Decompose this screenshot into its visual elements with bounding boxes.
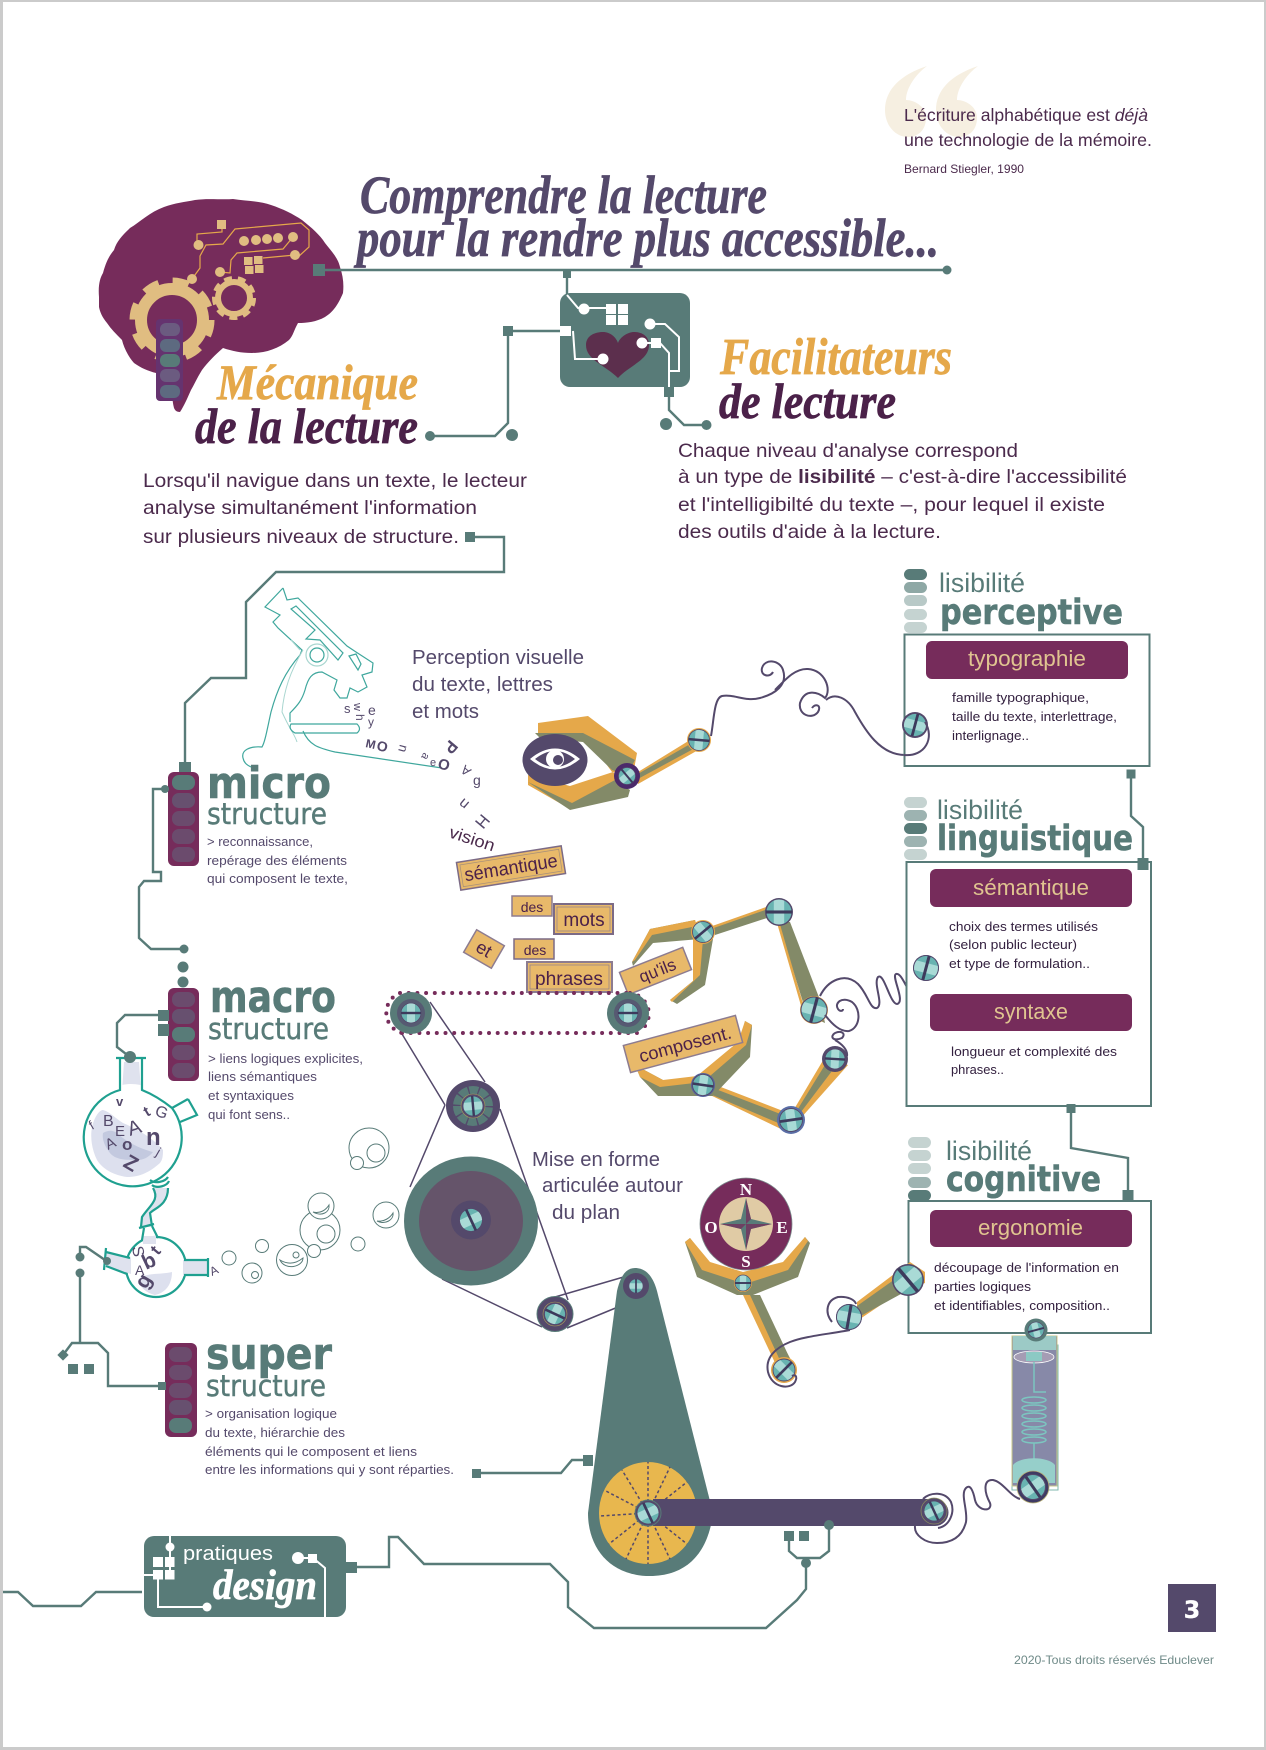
- panel: lisibilité linguistique: phrases..: [951, 1062, 1004, 1077]
- text: letters from microscope: M: [364, 736, 377, 752]
- text: mécanique intro: [143, 470, 528, 548]
- text: mécanique intro: sur plusieurs niveaux de structure.: [143, 526, 459, 548]
- text: mise en forme: [532, 1149, 683, 1224]
- circuit: perceptive to linguistique: [1126, 770, 1143, 860]
- panel: lisibilité linguistique: choix des termes utilisés: [949, 919, 1099, 934]
- panel: lisibilité cognitive: [908, 1136, 1151, 1333]
- icon: eye in arm: [522, 716, 711, 810]
- text: mise en forme: articulée autour: [542, 1175, 683, 1197]
- text: letters from microscope: a: [418, 750, 432, 763]
- panel: super structure: entre les informations qui y sont réparties.: [205, 1462, 454, 1477]
- icon: compass on arm: N: [740, 1180, 753, 1199]
- panel: lisibilité perceptive: perceptive: [940, 593, 1123, 633]
- page number: 3: [1184, 1596, 1200, 1624]
- panel: macro structure: qui font sens..: [208, 1107, 290, 1122]
- icon: lower claw arm: [635, 1021, 848, 1134]
- icon: heart chip: [560, 270, 712, 430]
- icon: flasks with letters: S: [128, 1245, 147, 1258]
- icon: quotation mark: [885, 66, 978, 137]
- circuit: bottom lines: [3, 1520, 834, 1628]
- panel: pratiques design: pratiques: [183, 1543, 273, 1565]
- panel: lisibilité perceptive: typographie: [968, 646, 1086, 671]
- circuit: title underline: [313, 264, 952, 276]
- text: letters from microscope: e: [430, 757, 436, 769]
- text: letters from microscope: vision: [447, 823, 497, 855]
- icon: arm to ergonomie: [834, 1259, 929, 1331]
- wire: compass loop: [767, 1297, 856, 1387]
- panel: micro structure: qui composent le texte,: [207, 871, 348, 886]
- circuit: macro to flask: [117, 1010, 169, 1057]
- wire: to perceptive: [711, 661, 929, 755]
- text: letters from microscope: H: [471, 810, 493, 832]
- icon: belt pulleys and chain: [386, 992, 649, 1332]
- tag: qu'ils: qu'ils: [636, 955, 679, 987]
- icon: flasks with letters: A: [125, 1116, 145, 1141]
- panel: lisibilité linguistique: syntaxe: [994, 999, 1068, 1024]
- panel: micro structure: structure: [207, 797, 327, 831]
- icon: flasks with letters: B: [103, 1113, 114, 1130]
- text: facilitateurs intro: et l'intelligibilté du texte –, pour lequel il existe: [678, 494, 1105, 516]
- panel: lisibilité cognitive: ergonomie: [978, 1215, 1083, 1240]
- icon: screw on perceptive: [901, 711, 929, 739]
- panel: micro structure: repérage des éléments: [207, 853, 348, 868]
- text: letters from microscope: O: [375, 737, 389, 755]
- panel: macro structure: et syntaxiques: [208, 1088, 295, 1103]
- icon: flasks with letters: A: [207, 1263, 221, 1279]
- panel: lisibilité linguistique: lisibilité: [937, 795, 1023, 825]
- circuit: micro to macro: [139, 785, 188, 988]
- panel: lisibilité linguistique: linguistique: [937, 819, 1133, 859]
- word tags: sémantique: [463, 851, 559, 886]
- icon: flasks with letters: [82, 1051, 221, 1297]
- icon: screw on linguistique: [911, 953, 941, 983]
- text: letters from microscope: y: [368, 715, 374, 729]
- panel: super structure: du texte, hiérarchie des: [205, 1425, 346, 1440]
- tag: qu'ils: [619, 947, 692, 995]
- panel: lisibilité perceptive: taille du texte, interlettrage,: [952, 709, 1117, 724]
- panel: super structure: éléments qui le composent et liens: [205, 1444, 418, 1459]
- icon: flasks with letters: E: [115, 1123, 125, 1140]
- text: letters from microscope: h: [353, 714, 367, 721]
- word tags: des: [521, 899, 543, 915]
- panel: macro structure: > liens logiques explicites,: [208, 1051, 363, 1066]
- title: Comprendre la lecture: [360, 165, 767, 225]
- text: letters from microscope: g: [473, 772, 481, 788]
- icon: compass on arm: [685, 1178, 810, 1386]
- title: pour la rendre plus accessible...: [354, 208, 939, 268]
- wire: bar to piston: [915, 1480, 1020, 1543]
- circuit: flask to super: [57, 1247, 166, 1390]
- icon: flasks with letters: G: [153, 1103, 170, 1123]
- text: perception visuelle: [412, 647, 584, 723]
- text: perception visuelle: et mots: [412, 701, 479, 723]
- panel: pratiques design: [144, 1536, 357, 1617]
- panel: lisibilité linguistique: sémantique: [973, 875, 1089, 900]
- icon: flasks with letters: t: [140, 1103, 153, 1120]
- icon: flasks with letters: v: [116, 1094, 124, 1109]
- text: perception visuelle: Perception visuelle: [412, 647, 584, 669]
- tag: composent: composent.: [637, 1022, 734, 1066]
- text: letters from microscope: n: [455, 795, 473, 813]
- icon: flasks with letters: t: [147, 1242, 165, 1259]
- text: facilitateurs intro: Chaque niveau d'analyse correspond: [678, 440, 1018, 462]
- word tags: [456, 846, 613, 992]
- icon: brain with gears: [99, 199, 343, 412]
- panel: pratiques design: design: [213, 1563, 317, 1609]
- quote: Bernard Stiegler, 1990: [904, 162, 1024, 176]
- circuit: brain to chip: [425, 326, 560, 441]
- quote: L'écriture alphabétique est déjà: [904, 105, 1148, 125]
- text: letters from microscope: A: [457, 762, 474, 779]
- title: [354, 165, 939, 268]
- circuit: intro to micro: [179, 532, 504, 773]
- icon: flasks with letters: Z: [119, 1150, 142, 1177]
- panel: lisibilité linguistique: [904, 795, 1151, 1106]
- text: facilitateurs intro: à un type de lisibilité – c'est-à-dire l'accessibilité: [678, 466, 1127, 488]
- text: letters from microscope: n: [395, 743, 412, 754]
- text: perception visuelle: du texte, lettres: [412, 674, 553, 696]
- icon: flasks with letters: g: [130, 1270, 157, 1292]
- icon: purple bar: [633, 1498, 949, 1528]
- panel: super structure: [165, 1329, 454, 1477]
- word tags: et: [472, 937, 496, 961]
- panel: super structure: super: [206, 1329, 332, 1380]
- heading: Facilitateurs de lecture: de lecture: [719, 373, 896, 429]
- icon: piston with spring: [1012, 1318, 1058, 1504]
- icon: upper claw arm: [632, 898, 830, 1026]
- text: letters from microscope: O: [436, 755, 452, 775]
- icon: flasks with letters: A: [135, 1262, 145, 1278]
- heading: Mécanique de la lecture: Mécanique: [216, 354, 418, 410]
- icon: microscope: [243, 588, 442, 768]
- panel: lisibilité linguistique: longueur et complexité des: [951, 1044, 1118, 1059]
- icon: flasks with letters: f: [86, 1118, 97, 1133]
- icon: flasks with letters: o: [122, 1135, 132, 1154]
- word tags: mots: [563, 910, 605, 931]
- icon: flasks with letters: j: [153, 1144, 164, 1159]
- text: letters from microscope: w: [351, 702, 363, 711]
- heading: Mécanique de la lecture: [195, 354, 418, 454]
- circuit: linguistique to cognitive: [1066, 1104, 1128, 1190]
- text: mécanique intro: Lorsqu'il navigue dans un texte, le lecteur: [143, 470, 528, 492]
- panel: super structure: structure: [206, 1369, 326, 1403]
- text: letters from microscope: [344, 701, 497, 855]
- text: letters from microscope: e: [368, 702, 376, 718]
- icon: compass on arm: O: [704, 1218, 718, 1237]
- word tags: des: [524, 942, 546, 958]
- text: letters from microscope: s: [344, 701, 351, 716]
- panel: micro structure: > reconnaissance,: [207, 834, 313, 849]
- panel: lisibilité linguistique: et type de formulation..: [949, 956, 1090, 971]
- panel: lisibilité cognitive: lisibilité: [946, 1136, 1032, 1166]
- panel: lisibilité cognitive: parties logiques: [934, 1279, 1032, 1294]
- page number: [1168, 1584, 1216, 1632]
- panel: micro structure: micro: [207, 758, 331, 809]
- wire: loop over box: [904, 722, 929, 755]
- panel: micro structure: [168, 758, 348, 886]
- text: facilitateurs intro: [678, 440, 1127, 543]
- panel: macro structure: liens sémantiques: [208, 1069, 318, 1084]
- heading: Facilitateurs de lecture: [719, 329, 952, 429]
- icon: flasks with letters: n: [146, 1124, 161, 1151]
- panel: macro structure: [168, 972, 363, 1122]
- panel: macro structure: macro: [210, 972, 336, 1023]
- quote: [904, 105, 1152, 176]
- heading: Facilitateurs de lecture: Facilitateurs: [719, 329, 952, 386]
- panel: lisibilité cognitive: et identifiables, composition..: [934, 1298, 1110, 1313]
- panel: lisibilité perceptive: lisibilité: [939, 568, 1025, 598]
- icon: arm with gold wheel: [588, 1268, 713, 1576]
- icon: bubbles: [222, 1128, 399, 1283]
- text: letters from microscope: P: [440, 736, 461, 757]
- panel: lisibilité cognitive: découpage de l'information en: [934, 1260, 1119, 1275]
- panel: macro structure: structure: [208, 1012, 329, 1046]
- text: mise en forme: Mise en forme: [532, 1149, 660, 1171]
- tag: composent: [623, 1015, 743, 1073]
- icon: flasks with letters: A: [103, 1134, 119, 1154]
- text: facilitateurs intro: des outils d'aide à la lecture.: [678, 521, 941, 543]
- text: mise en forme: du plan: [552, 1202, 620, 1224]
- word tags: phrases: [535, 969, 603, 990]
- text: mécanique intro: analyse simultanément l'information: [143, 497, 477, 519]
- footer: 2020-Tous droits réservés Educlever: [1014, 1653, 1214, 1667]
- heading: Mécanique de la lecture: de la lecture: [195, 398, 418, 454]
- panel: lisibilité linguistique: (selon public lecteur): [949, 937, 1077, 952]
- panel: lisibilité perceptive: [904, 568, 1150, 766]
- quote: une technologie de la mémoire.: [904, 130, 1152, 150]
- panel: lisibilité cognitive: cognitive: [946, 1160, 1101, 1200]
- icon: compass on arm: S: [741, 1252, 751, 1271]
- wire: to linguistique: [820, 974, 928, 1056]
- circuit: super to arm: [472, 1455, 593, 1478]
- panel: lisibilité perceptive: interlignage..: [952, 728, 1029, 743]
- icon: flasks with letters: b: [138, 1248, 160, 1275]
- panel: lisibilité perceptive: famille typographique,: [952, 690, 1089, 705]
- icon: compass on arm: E: [776, 1218, 788, 1237]
- panel: super structure: > organisation logique: [205, 1406, 337, 1421]
